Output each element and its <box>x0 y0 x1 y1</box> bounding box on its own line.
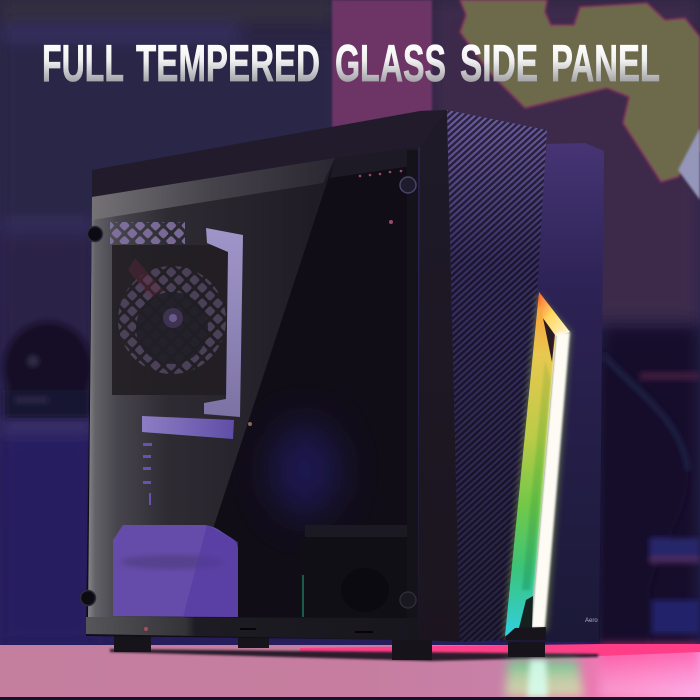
wooden table <box>0 644 700 700</box>
PSU cutout cloud <box>120 555 224 569</box>
interior screw <box>248 422 252 426</box>
green LED reflection <box>505 660 584 697</box>
title: TEMPERED <box>136 35 320 93</box>
PSU cutout <box>113 525 238 617</box>
interior LED dots <box>270 170 402 240</box>
title: SIDE <box>460 35 538 93</box>
PSU shroud <box>300 525 407 617</box>
glass edge tint on cutout <box>183 525 238 617</box>
upper window frame <box>330 147 418 178</box>
fan and mesh <box>112 245 228 395</box>
case interior through window <box>86 147 418 640</box>
expansion slot marks <box>143 443 152 505</box>
top LED corner <box>539 292 570 336</box>
dark inner notch <box>543 318 555 362</box>
glass mounting screws <box>80 177 416 608</box>
hot pink reflection right <box>600 645 700 697</box>
green streak in band <box>522 360 551 590</box>
hot pink back strip <box>300 644 700 656</box>
title: GLASS <box>335 35 446 93</box>
RGB LED strip <box>503 292 572 640</box>
bottom frame <box>86 617 418 640</box>
case feet <box>114 634 545 660</box>
white strip <box>531 332 570 628</box>
coloured band <box>505 292 556 636</box>
background: pink column <box>332 0 432 130</box>
side frame of case <box>92 110 460 642</box>
dark bottom bracket <box>519 596 533 628</box>
top frame band <box>92 110 447 197</box>
purple slot bar <box>142 416 234 439</box>
top glare band <box>92 158 335 220</box>
top ventilation mesh <box>110 222 185 244</box>
inner right frame strip <box>407 150 418 620</box>
brand logo: Aero <box>585 618 598 624</box>
LED base <box>506 627 546 640</box>
rear panel of case <box>500 143 604 642</box>
case shadow on table <box>110 649 598 661</box>
background: yellow hexagon light panels <box>460 0 700 182</box>
lavender bracket <box>204 228 243 417</box>
background: gaming chair <box>600 350 700 645</box>
title: FULL <box>42 35 124 93</box>
blue interior glow <box>273 424 337 516</box>
background: grey hexagon light panel <box>678 128 700 200</box>
glow <box>503 292 572 638</box>
tempered glass reflection <box>88 158 335 620</box>
title <box>42 35 660 93</box>
background: figurine silhouette <box>4 322 92 418</box>
carbon fibre front panel <box>447 110 547 642</box>
